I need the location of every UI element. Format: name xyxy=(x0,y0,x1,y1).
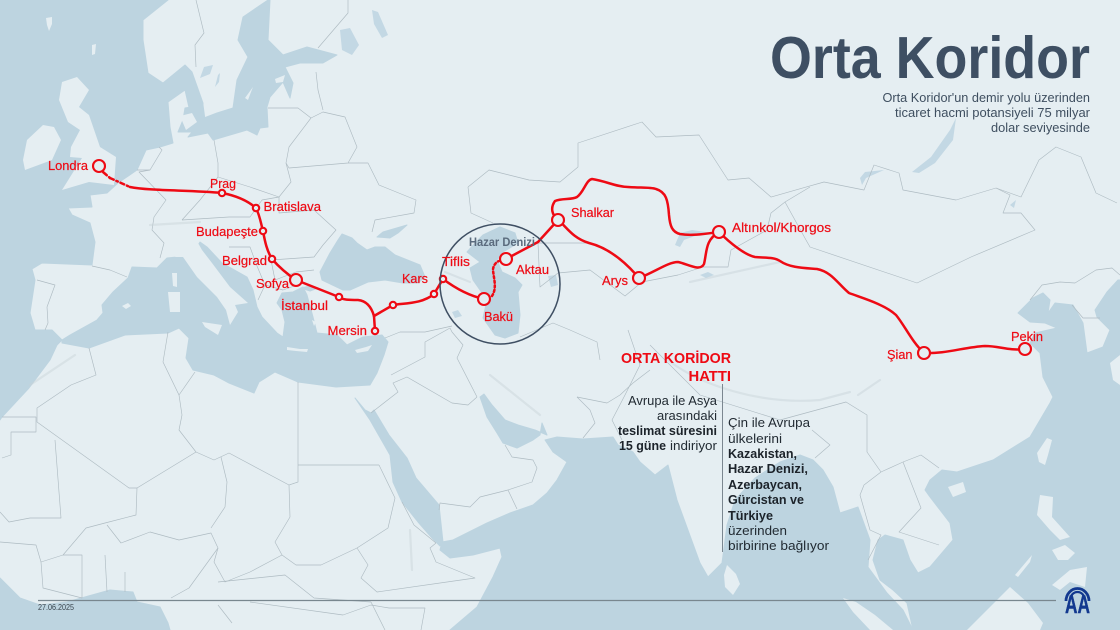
label: Hazar Denizi: Hazar Denizi xyxy=(469,235,535,249)
label: Pekin: Pekin xyxy=(1011,329,1043,344)
route: Channel dashed section xyxy=(103,172,110,178)
station: Şian xyxy=(918,347,930,359)
station: Londra xyxy=(93,160,105,172)
station: Arys xyxy=(633,272,645,284)
sea: north Atlantic xyxy=(0,0,203,420)
route: southern branch xyxy=(558,220,639,278)
heading: Orta Koridor Hattı xyxy=(621,350,731,385)
sea: Danish straits xyxy=(178,105,205,132)
route: Altınkol to Şian xyxy=(719,232,924,353)
text block: connected countries: Hazar Denizi, xyxy=(728,461,808,476)
sea: Pacific and South China Sea xyxy=(873,280,1120,630)
text block: connected countries: Azerbaycan, xyxy=(728,477,802,492)
station: Tiflis xyxy=(440,276,446,282)
sea: Caspian xyxy=(467,227,522,338)
station: Prag xyxy=(219,190,225,196)
station: Kars xyxy=(431,291,437,297)
text block: connected countries: Gürcistan ve xyxy=(728,492,804,507)
text block: delivery time: teslimat süresini xyxy=(618,423,717,438)
label: Bakü: Bakü xyxy=(484,309,513,324)
subtitle: dolar seviyesinde xyxy=(991,120,1090,135)
route: Caspian dotted crossing xyxy=(492,261,499,296)
text block: delivery time: arasındaki xyxy=(657,408,717,423)
route: Mersin branch xyxy=(374,316,375,331)
route: Europe to Türkiye xyxy=(130,187,374,316)
station: Budapeşte xyxy=(260,228,266,234)
label: Kars: Kars xyxy=(402,271,428,286)
sea: Indian Ocean xyxy=(440,437,913,630)
route: Channel dashed section east xyxy=(110,178,130,187)
text block: delivery time: indiriyor xyxy=(670,438,718,453)
label: Londra: Londra xyxy=(48,158,89,173)
label: Arys: Arys xyxy=(602,273,628,288)
logo: AA: AA xyxy=(1065,591,1090,619)
islands: Asia and Pacific xyxy=(724,355,1120,630)
route: Türkiye to Bakü xyxy=(374,279,484,316)
route: Şian to Pekin xyxy=(924,346,1025,353)
stations xyxy=(93,160,1031,359)
station: Altınkol/Khorgos xyxy=(713,226,725,238)
text block: connected countries: Kazakistan, xyxy=(728,446,797,461)
sea: Red Sea xyxy=(355,398,443,546)
route: northern branch xyxy=(552,179,719,235)
sea: Marmara xyxy=(301,286,318,291)
date: 27.06.2025 xyxy=(38,602,74,612)
heading: Orta Koridor Hattı: ORTA KORİDOR xyxy=(621,350,731,367)
label: Bratislava: Bratislava xyxy=(264,199,322,214)
callout circle: Caspian xyxy=(440,224,560,344)
station: Shalkar xyxy=(552,214,564,226)
label: Belgrad: Belgrad xyxy=(222,253,267,268)
label: Tiflis: Tiflis xyxy=(442,254,471,269)
station: transfer east of Ankara xyxy=(390,302,396,308)
subtitle: Orta Koridor'un demir yolu üzerinden xyxy=(882,90,1090,105)
label: Sofya: Sofya xyxy=(256,276,290,291)
text block: connected countries: ülkelerini xyxy=(728,431,782,446)
text block: connected countries xyxy=(728,415,830,553)
route: Arys to Altınkol xyxy=(639,232,719,278)
islands: Britain, Ireland and Atlantic xyxy=(23,17,285,190)
sea: Gulf of Guinea xyxy=(0,578,170,630)
subtitle: ticaret hacmi potansiyeli 75 milyar xyxy=(895,105,1091,120)
station: Mersin xyxy=(372,328,378,334)
sea: Baltic xyxy=(188,0,337,140)
sea: Black Sea xyxy=(320,234,425,290)
label: Prag: Prag xyxy=(210,176,236,191)
title: Orta Koridor xyxy=(770,25,1090,91)
text block: delivery time xyxy=(618,393,718,453)
label: Shalkar: Shalkar xyxy=(571,205,615,220)
text block: connected countries: birbirine bağlıyor xyxy=(728,538,830,553)
station: Bakü xyxy=(478,293,490,305)
city labels xyxy=(48,158,1043,362)
footer rule xyxy=(38,600,1056,602)
label: Şian: Şian xyxy=(887,347,912,362)
label: Aktau: Aktau xyxy=(516,262,549,277)
station: Bratislava xyxy=(253,205,259,211)
station: Pekin xyxy=(1019,343,1031,355)
text block: connected countries: üzerinden xyxy=(728,523,787,538)
text block: connected countries: Türkiye xyxy=(728,508,773,523)
label: Altınkol/Khorgos: Altınkol/Khorgos xyxy=(732,220,832,235)
logo: AA xyxy=(1065,588,1090,619)
label: Budapeşte: Budapeşte xyxy=(196,224,258,239)
text block: delivery time: Avrupa ile Asya xyxy=(628,393,718,408)
sea: Persian Gulf xyxy=(480,394,547,448)
station: Belgrad xyxy=(269,256,275,262)
route: Aktau to Shalkar xyxy=(506,220,558,259)
station: İstanbul xyxy=(336,294,342,300)
sea: Azov xyxy=(377,225,407,238)
route: Orta Koridor rail line xyxy=(93,160,1031,359)
station: Aktau xyxy=(500,253,512,265)
sea: Mediterranean xyxy=(62,242,388,393)
heading: Orta Koridor Hattı: HATTI xyxy=(688,368,731,385)
station: Sofya xyxy=(290,274,302,286)
map: terrain relief strokes xyxy=(30,222,880,570)
label: Mersin: Mersin xyxy=(328,323,367,338)
text block: delivery time: 15 güne xyxy=(619,438,666,453)
text block: connected countries: Çin ile Avrupa xyxy=(728,415,811,430)
subtitle xyxy=(882,90,1091,135)
divider line for notes xyxy=(722,384,724,552)
lakes xyxy=(200,10,1016,318)
label: İstanbul: İstanbul xyxy=(281,298,328,313)
islands: Mediterranean xyxy=(122,243,372,353)
